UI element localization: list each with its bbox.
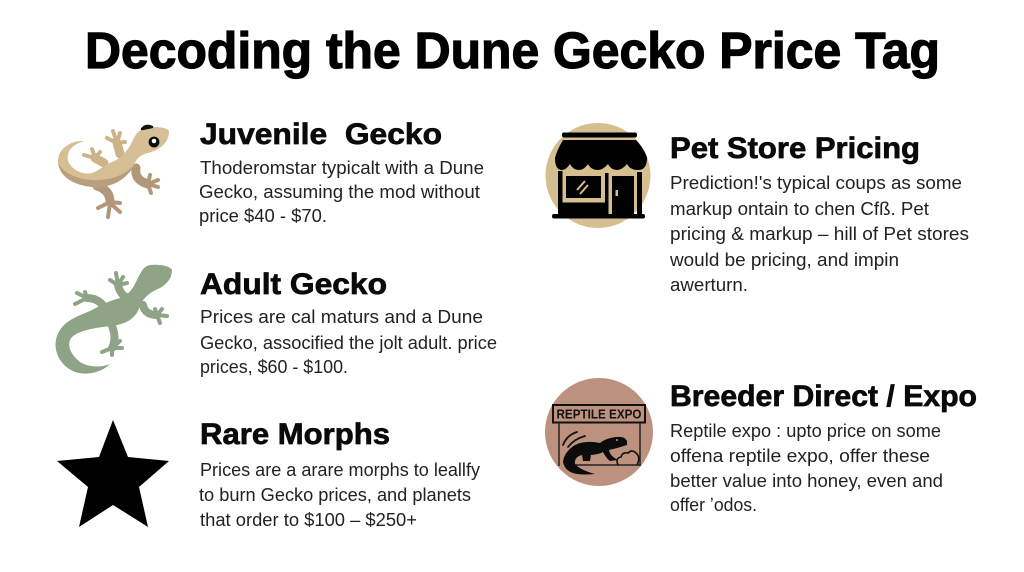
icon: black star (57, 420, 169, 527)
heading: rare morphs: Rare Morphs (200, 418, 390, 451)
icon: reptile expo booth: REPTILE EXPO (556, 406, 642, 422)
text: breeder description: Reptile expo : upto price on some (670, 421, 941, 441)
text: adult description: Gecko, assocified the jolt adult. price (200, 333, 497, 353)
title: Decoding the Dune Gecko Price Tag (85, 22, 940, 79)
text: breeder description (670, 421, 943, 515)
text: rare morphs description: Prices are a arare morphs to leallfy (200, 460, 480, 480)
text: adult description: Prices are cal maturs and a Dune (200, 307, 483, 327)
panel: rare morphs (57, 418, 480, 530)
text: breeder description: better value into honey, even and (670, 471, 943, 491)
panel: adult gecko (56, 265, 497, 377)
text: rare morphs description: that order to $100 – $250+ (200, 510, 417, 530)
icon: green adult gecko (56, 265, 172, 374)
text: breeder description: offena reptile expo, offer these (670, 446, 930, 466)
icon: storefront (546, 123, 650, 228)
icon: tan juvenile gecko (58, 126, 169, 217)
text: juvenile description: Gecko, assuming the mod without (199, 182, 480, 202)
text: breeder description: offer ʼodos. (670, 495, 757, 515)
panel: breeder direct / expo (545, 378, 977, 515)
text: pet store description: awerturn. (670, 275, 748, 295)
text: pet store description: Prediction!'s typical coups as some (670, 173, 962, 193)
text: juvenile description: price $40 - $70. (199, 206, 327, 226)
text: pet store description: pricing & markup – hill of Pet stores (670, 224, 969, 244)
heading: juvenile gecko: Juvenile Gecko (200, 118, 442, 151)
icon: reptile expo booth (545, 378, 653, 486)
text: juvenile description: Thoderomstar typicalt with a Dune (200, 158, 484, 178)
text: pet store description: would be pricing, and impin (669, 250, 899, 270)
text: rare morphs description (199, 460, 480, 530)
text: adult description (200, 307, 497, 377)
text: rare morphs description: to burn Gecko prices, and planets (199, 485, 471, 505)
heading: breeder direct / expo: Breeder Direct / Expo (670, 380, 977, 413)
text: pet store description: markup ontain to chen Cfß. Pet (670, 199, 929, 219)
heading: adult gecko: Adult Gecko (200, 268, 387, 301)
text: juvenile description (199, 158, 484, 226)
panel: juvenile gecko (58, 118, 484, 226)
panel: pet store pricing (546, 123, 969, 295)
text: pet store description (669, 173, 969, 295)
heading: pet store pricing: Pet Store Pricing (670, 132, 920, 165)
text: adult description: prices, $60 - $100. (200, 357, 348, 377)
